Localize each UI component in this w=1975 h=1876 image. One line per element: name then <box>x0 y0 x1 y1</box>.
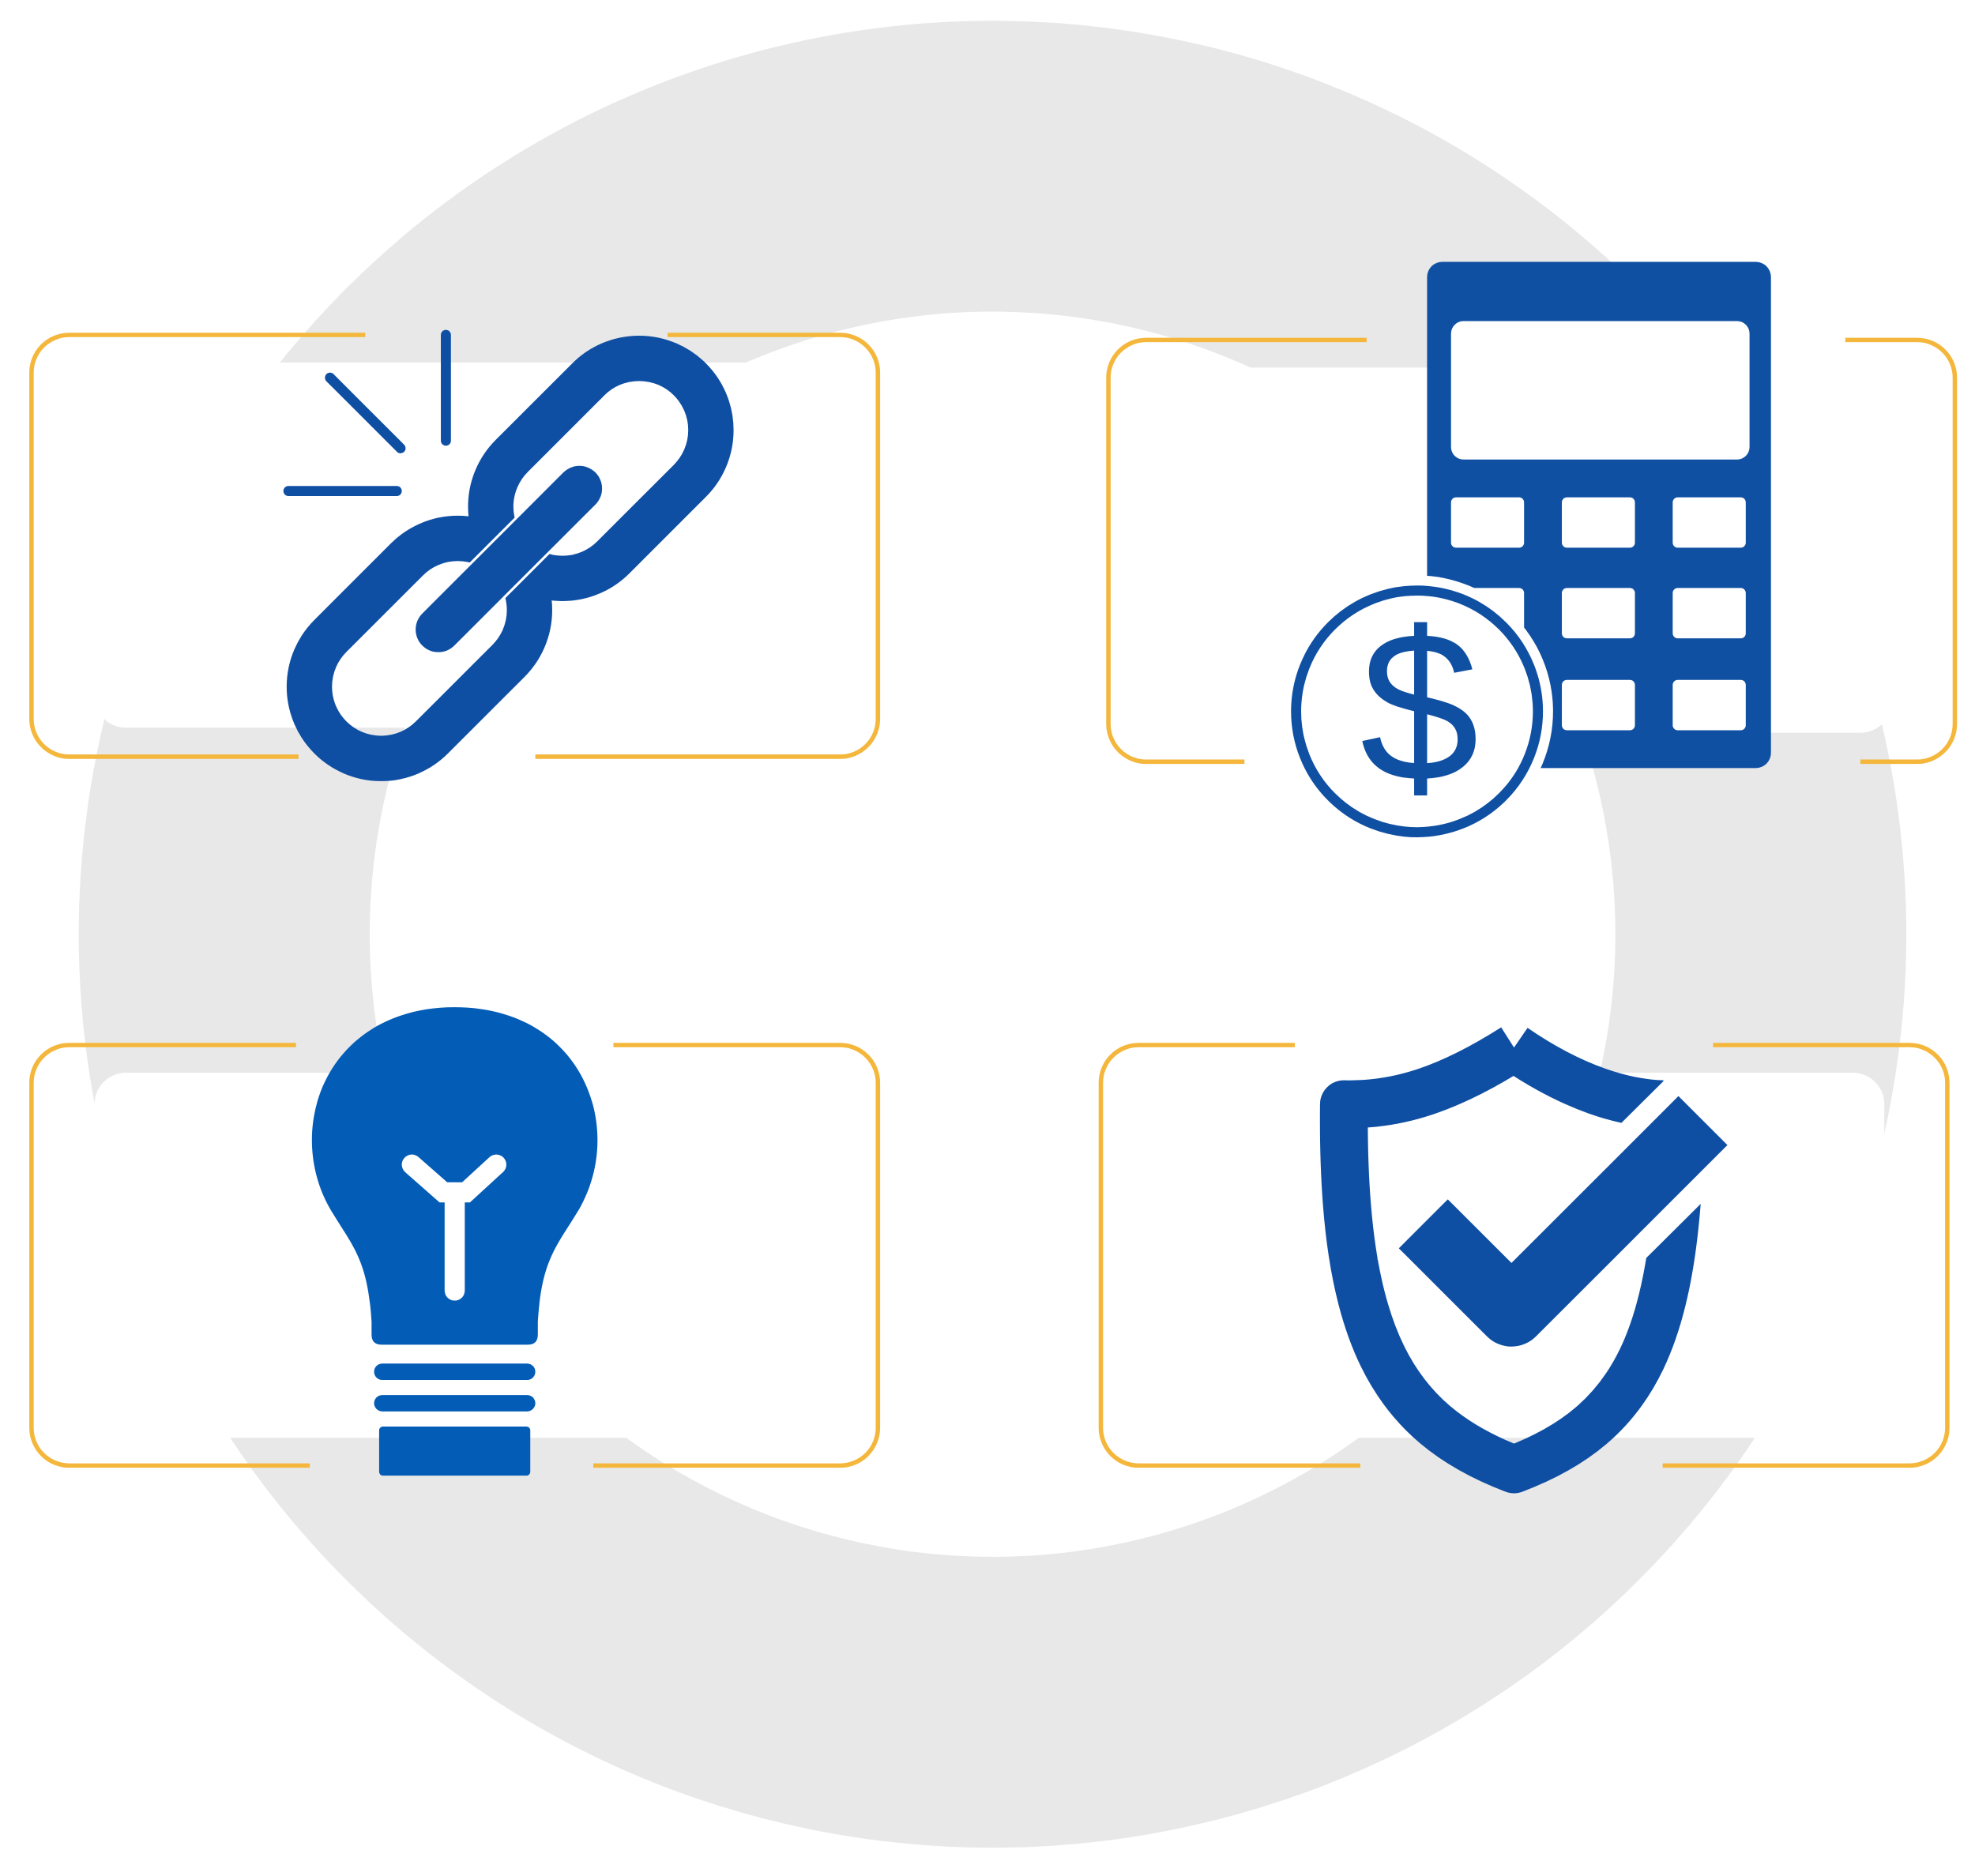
icon: lightbulb <box>312 1007 597 1476</box>
panel: bottom-right box <box>1100 1045 1947 1465</box>
panel: top-left box <box>32 335 878 757</box>
background ring <box>224 166 1761 1702</box>
panel: top-right box <box>1108 340 1954 761</box>
icon: calculator with dollar coin <box>1281 262 1771 848</box>
icon: shield with checkmark <box>1344 1047 1708 1469</box>
icon: calculator with dollar coin: $ <box>1360 588 1479 826</box>
panel: bottom-left box <box>32 1045 878 1465</box>
icon: broken chain link <box>280 329 741 788</box>
